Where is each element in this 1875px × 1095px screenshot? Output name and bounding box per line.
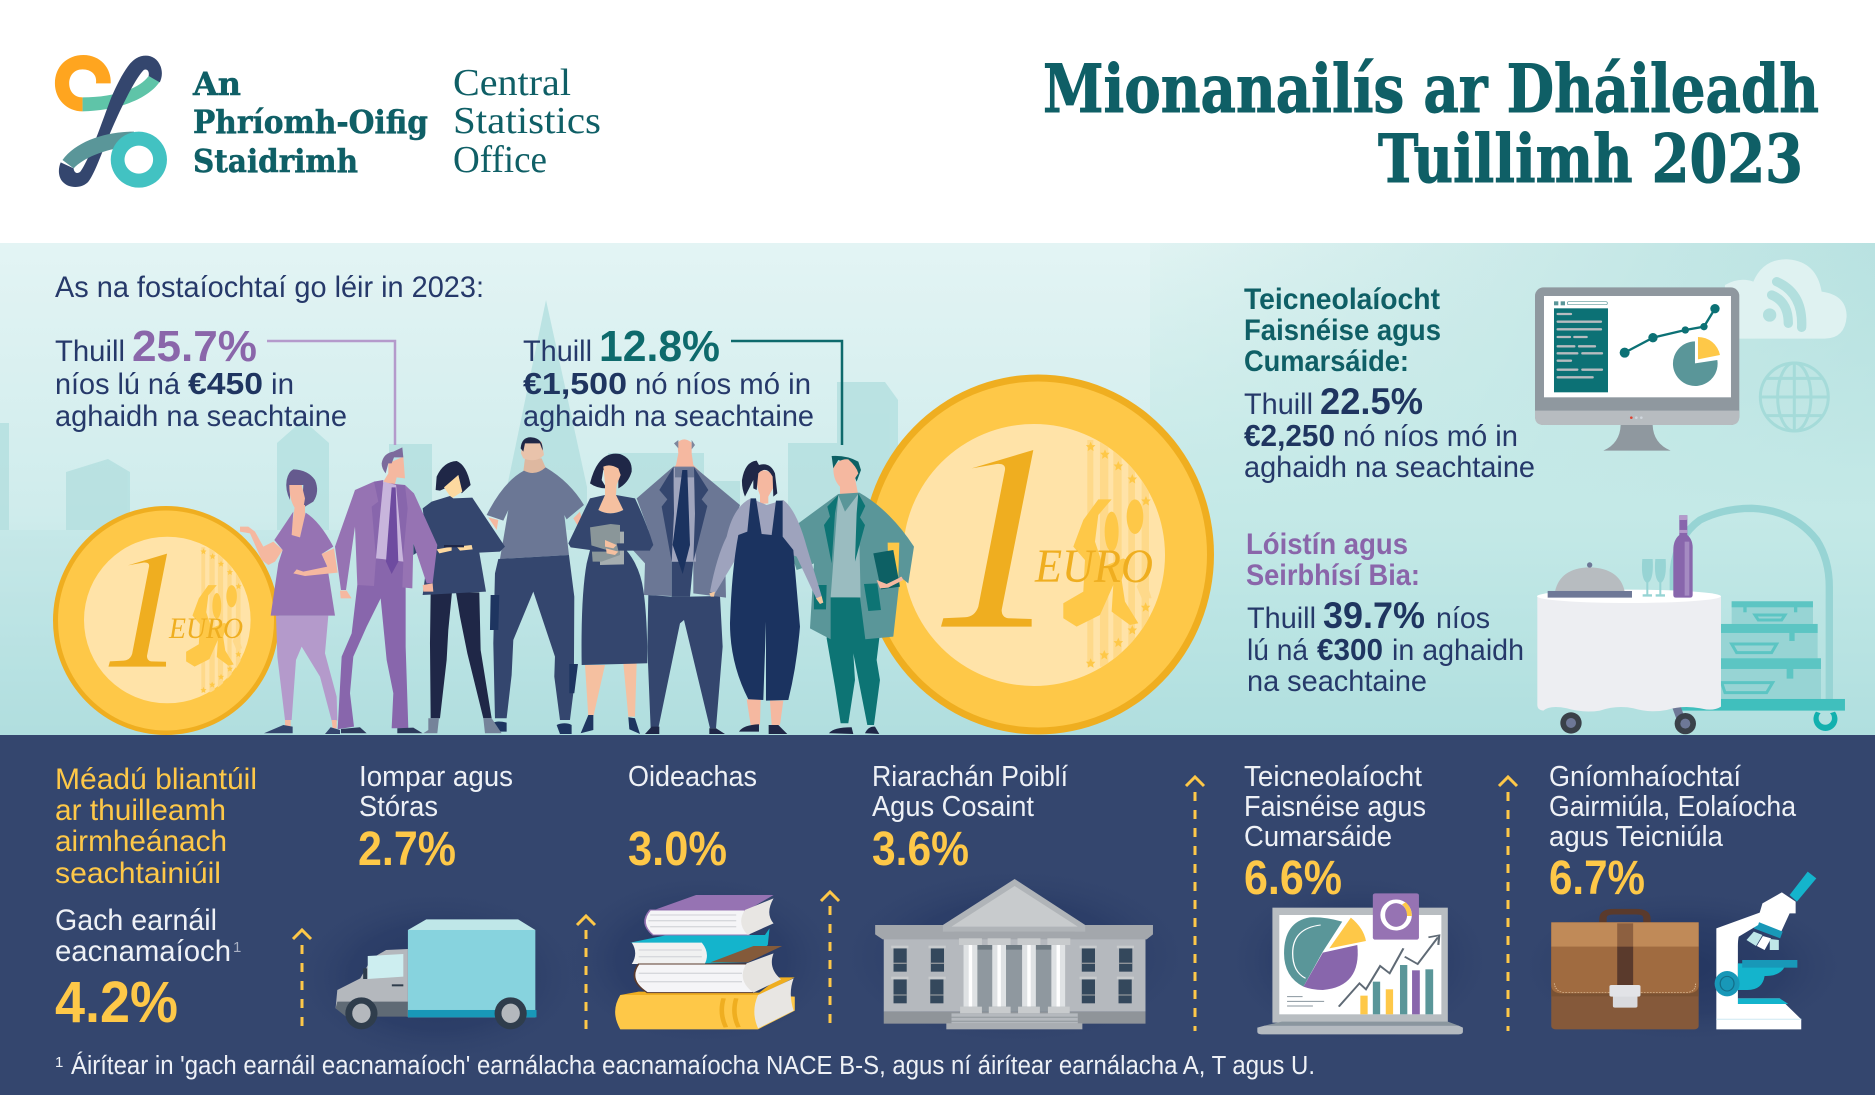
arrow 4 xyxy=(1186,777,1204,1031)
person 4: man in grey T-shirt xyxy=(487,437,585,734)
sector: education xyxy=(628,761,757,876)
sector: professional, scientific and technical: 6.7% xyxy=(1549,852,1645,905)
stat: 25.7% xyxy=(55,322,347,433)
accommodation and food text block: níos xyxy=(1436,602,1490,635)
header background xyxy=(0,0,1875,243)
header: annual growth label: ar thuilleamh xyxy=(55,794,226,827)
accommodation and food text block: Seirbhísí Bia: xyxy=(1246,559,1420,592)
logo text: Irish: Phríomh-Oifig xyxy=(193,103,428,141)
all sectors stat: eacnamaíoch xyxy=(55,935,231,968)
accommodation and food text block: Thuill xyxy=(1247,602,1316,635)
logo text: English xyxy=(453,62,601,181)
suitcases xyxy=(1721,601,1821,699)
person 6: bald man in grey suit xyxy=(627,439,740,734)
large euro coin: EURO xyxy=(1034,540,1153,593)
header: annual growth label: airmheánach xyxy=(55,825,227,858)
group of eight people xyxy=(240,437,914,734)
ICT text block: Cumarsáide: xyxy=(1244,345,1409,378)
all sectors stat: 1 xyxy=(233,939,241,956)
logo text: Irish xyxy=(192,65,428,180)
sector: transport and storage: 2.7% xyxy=(358,823,456,876)
stat: 25.7%: níos lú ná xyxy=(55,368,181,401)
all sectors stat xyxy=(55,904,241,1035)
arrow 5 xyxy=(1499,777,1517,1031)
icon group: monitor, cloud, globe xyxy=(1535,259,1847,451)
person 7: woman in navy overalls xyxy=(709,461,823,734)
stat: 12.8%: Thuill xyxy=(523,335,592,368)
logo text: Irish: An xyxy=(192,65,241,103)
header: annual growth label: seachtainiúil xyxy=(55,857,221,890)
stat: 12.8%: nó níos mó in xyxy=(635,368,811,401)
people on the right xyxy=(568,439,914,734)
title xyxy=(1043,50,1819,198)
ICT text block xyxy=(1244,283,1535,484)
sector: transport and storage: Stóras xyxy=(359,791,438,823)
person 3: woman in navy top and black leggings xyxy=(413,461,505,733)
stat: 25.7%: aghaidh na seachtaine xyxy=(55,400,347,433)
sector: education: 3.0% xyxy=(628,823,727,876)
sector: ICT: Teicneolaíocht xyxy=(1244,761,1422,793)
accommodation and food text block: 39.7% xyxy=(1323,595,1425,636)
arrow 1 xyxy=(293,930,311,1031)
accommodation and food text block: in aghaidh xyxy=(1392,634,1524,667)
ICT text block: nó níos mó in xyxy=(1343,420,1518,453)
sector: public administration and defence: Riarachán Poiblí xyxy=(872,761,1068,793)
person 8: man in green coat xyxy=(787,456,914,734)
sector: professional, scientific and technical: agus Teicniúla xyxy=(1549,821,1723,853)
sector: professional, scientific and technical: Gníomhaíochtaí xyxy=(1549,761,1741,793)
cloud with wifi xyxy=(1724,259,1847,339)
accommodation and food text block: Lóistín agus xyxy=(1246,528,1408,561)
large euro coin xyxy=(862,374,1214,734)
people on the left xyxy=(240,437,585,734)
header: annual growth label: Méadú bliantúil xyxy=(55,763,257,796)
sector: professional, scientific and technical: Gairmiúla, Eolaíocha xyxy=(1549,791,1796,823)
sector: education: Oideachas xyxy=(628,761,757,793)
connector: teal xyxy=(731,341,842,445)
city skyline xyxy=(0,300,1150,735)
ICT text block: Faisnéise agus xyxy=(1244,314,1441,347)
sector: ICT: 6.6% xyxy=(1244,852,1342,905)
icon: stack of books xyxy=(558,870,845,1050)
footnote: Áirítear in 'gach earnáil eacnamaíoch' earnálacha eacnamaíocha NACE B-S, agus ní áirítear earnálacha A, T agus U. xyxy=(71,1051,1315,1080)
connector: purple xyxy=(267,341,395,445)
accommodation and food text block xyxy=(1246,528,1524,698)
sector: public administration and defence: 3.6% xyxy=(872,823,969,876)
icon: hotel trolley with table xyxy=(1537,508,1845,734)
sector: transport and storage xyxy=(358,761,513,876)
stat: 12.8% xyxy=(523,322,814,433)
small euro coin xyxy=(53,506,279,735)
icon: briefcase xyxy=(1510,887,1855,1047)
sector: transport and storage: Iompar agus xyxy=(359,761,513,793)
logo text: Irish: Staidrimh xyxy=(193,142,358,180)
sector: ICT: Faisnéise agus xyxy=(1244,791,1426,823)
person 5: woman in navy dress with folder xyxy=(568,454,653,734)
accommodation and food text block: €300 xyxy=(1317,632,1383,667)
stat: 25.7%: 25.7% xyxy=(132,322,257,371)
stat: 12.8%: 12.8% xyxy=(599,322,720,371)
sector: ICT: Cumarsáide xyxy=(1244,821,1392,853)
person 1: woman in purple top xyxy=(240,469,340,734)
intro line: As na fostaíochtaí go léir in 2023: xyxy=(55,271,484,304)
stat: 25.7%: in xyxy=(271,368,294,401)
sector: public administration and defence xyxy=(872,761,1068,876)
illustration background xyxy=(0,243,1875,735)
arrow 2 xyxy=(577,916,595,1031)
ICT text block: €2,250 xyxy=(1244,418,1335,453)
header: annual growth label xyxy=(55,763,257,890)
arrow 3 xyxy=(821,892,839,1031)
accommodation and food text block: na seachtaine xyxy=(1247,665,1427,698)
ICT text block: 22.5% xyxy=(1320,381,1423,422)
accommodation and food text block: lú ná xyxy=(1247,634,1309,667)
bottom navy band xyxy=(0,735,1875,1095)
all sectors stat: Gach earnáil xyxy=(55,904,217,937)
icon: government building xyxy=(831,863,1198,1050)
all sectors stat: 4.2% xyxy=(55,970,178,1035)
globe xyxy=(1760,363,1828,431)
icon: laptop with charts xyxy=(1222,870,1497,1050)
stat: 12.8%: €1,500 xyxy=(523,366,627,401)
monitor xyxy=(1535,287,1739,451)
small euro coin: EURO xyxy=(168,612,243,645)
stat: 25.7%: Thuill xyxy=(55,335,125,368)
logo text: English: Office xyxy=(453,139,547,181)
ICT text block: aghaidh na seachtaine xyxy=(1244,451,1535,484)
ICT text block: Thuill xyxy=(1244,388,1313,421)
sector: professional, scientific and technical xyxy=(1549,761,1796,905)
icon: microscope xyxy=(1715,872,1816,1029)
ICT text block: Teicneolaíocht xyxy=(1244,283,1440,316)
logo mark xyxy=(55,55,167,188)
sector: public administration and defence: Agus Cosaint xyxy=(872,791,1034,823)
person 2: man in purple suit xyxy=(335,447,437,733)
icon: truck xyxy=(289,887,587,1067)
logo text: English: Statistics xyxy=(453,100,601,142)
stat: 25.7%: €450 xyxy=(188,366,263,401)
logo text: English: Central xyxy=(453,62,571,104)
footnote: 1 xyxy=(55,1054,63,1071)
stat: 12.8%: aghaidh na seachtaine xyxy=(523,400,814,433)
sector: ICT xyxy=(1244,761,1426,905)
